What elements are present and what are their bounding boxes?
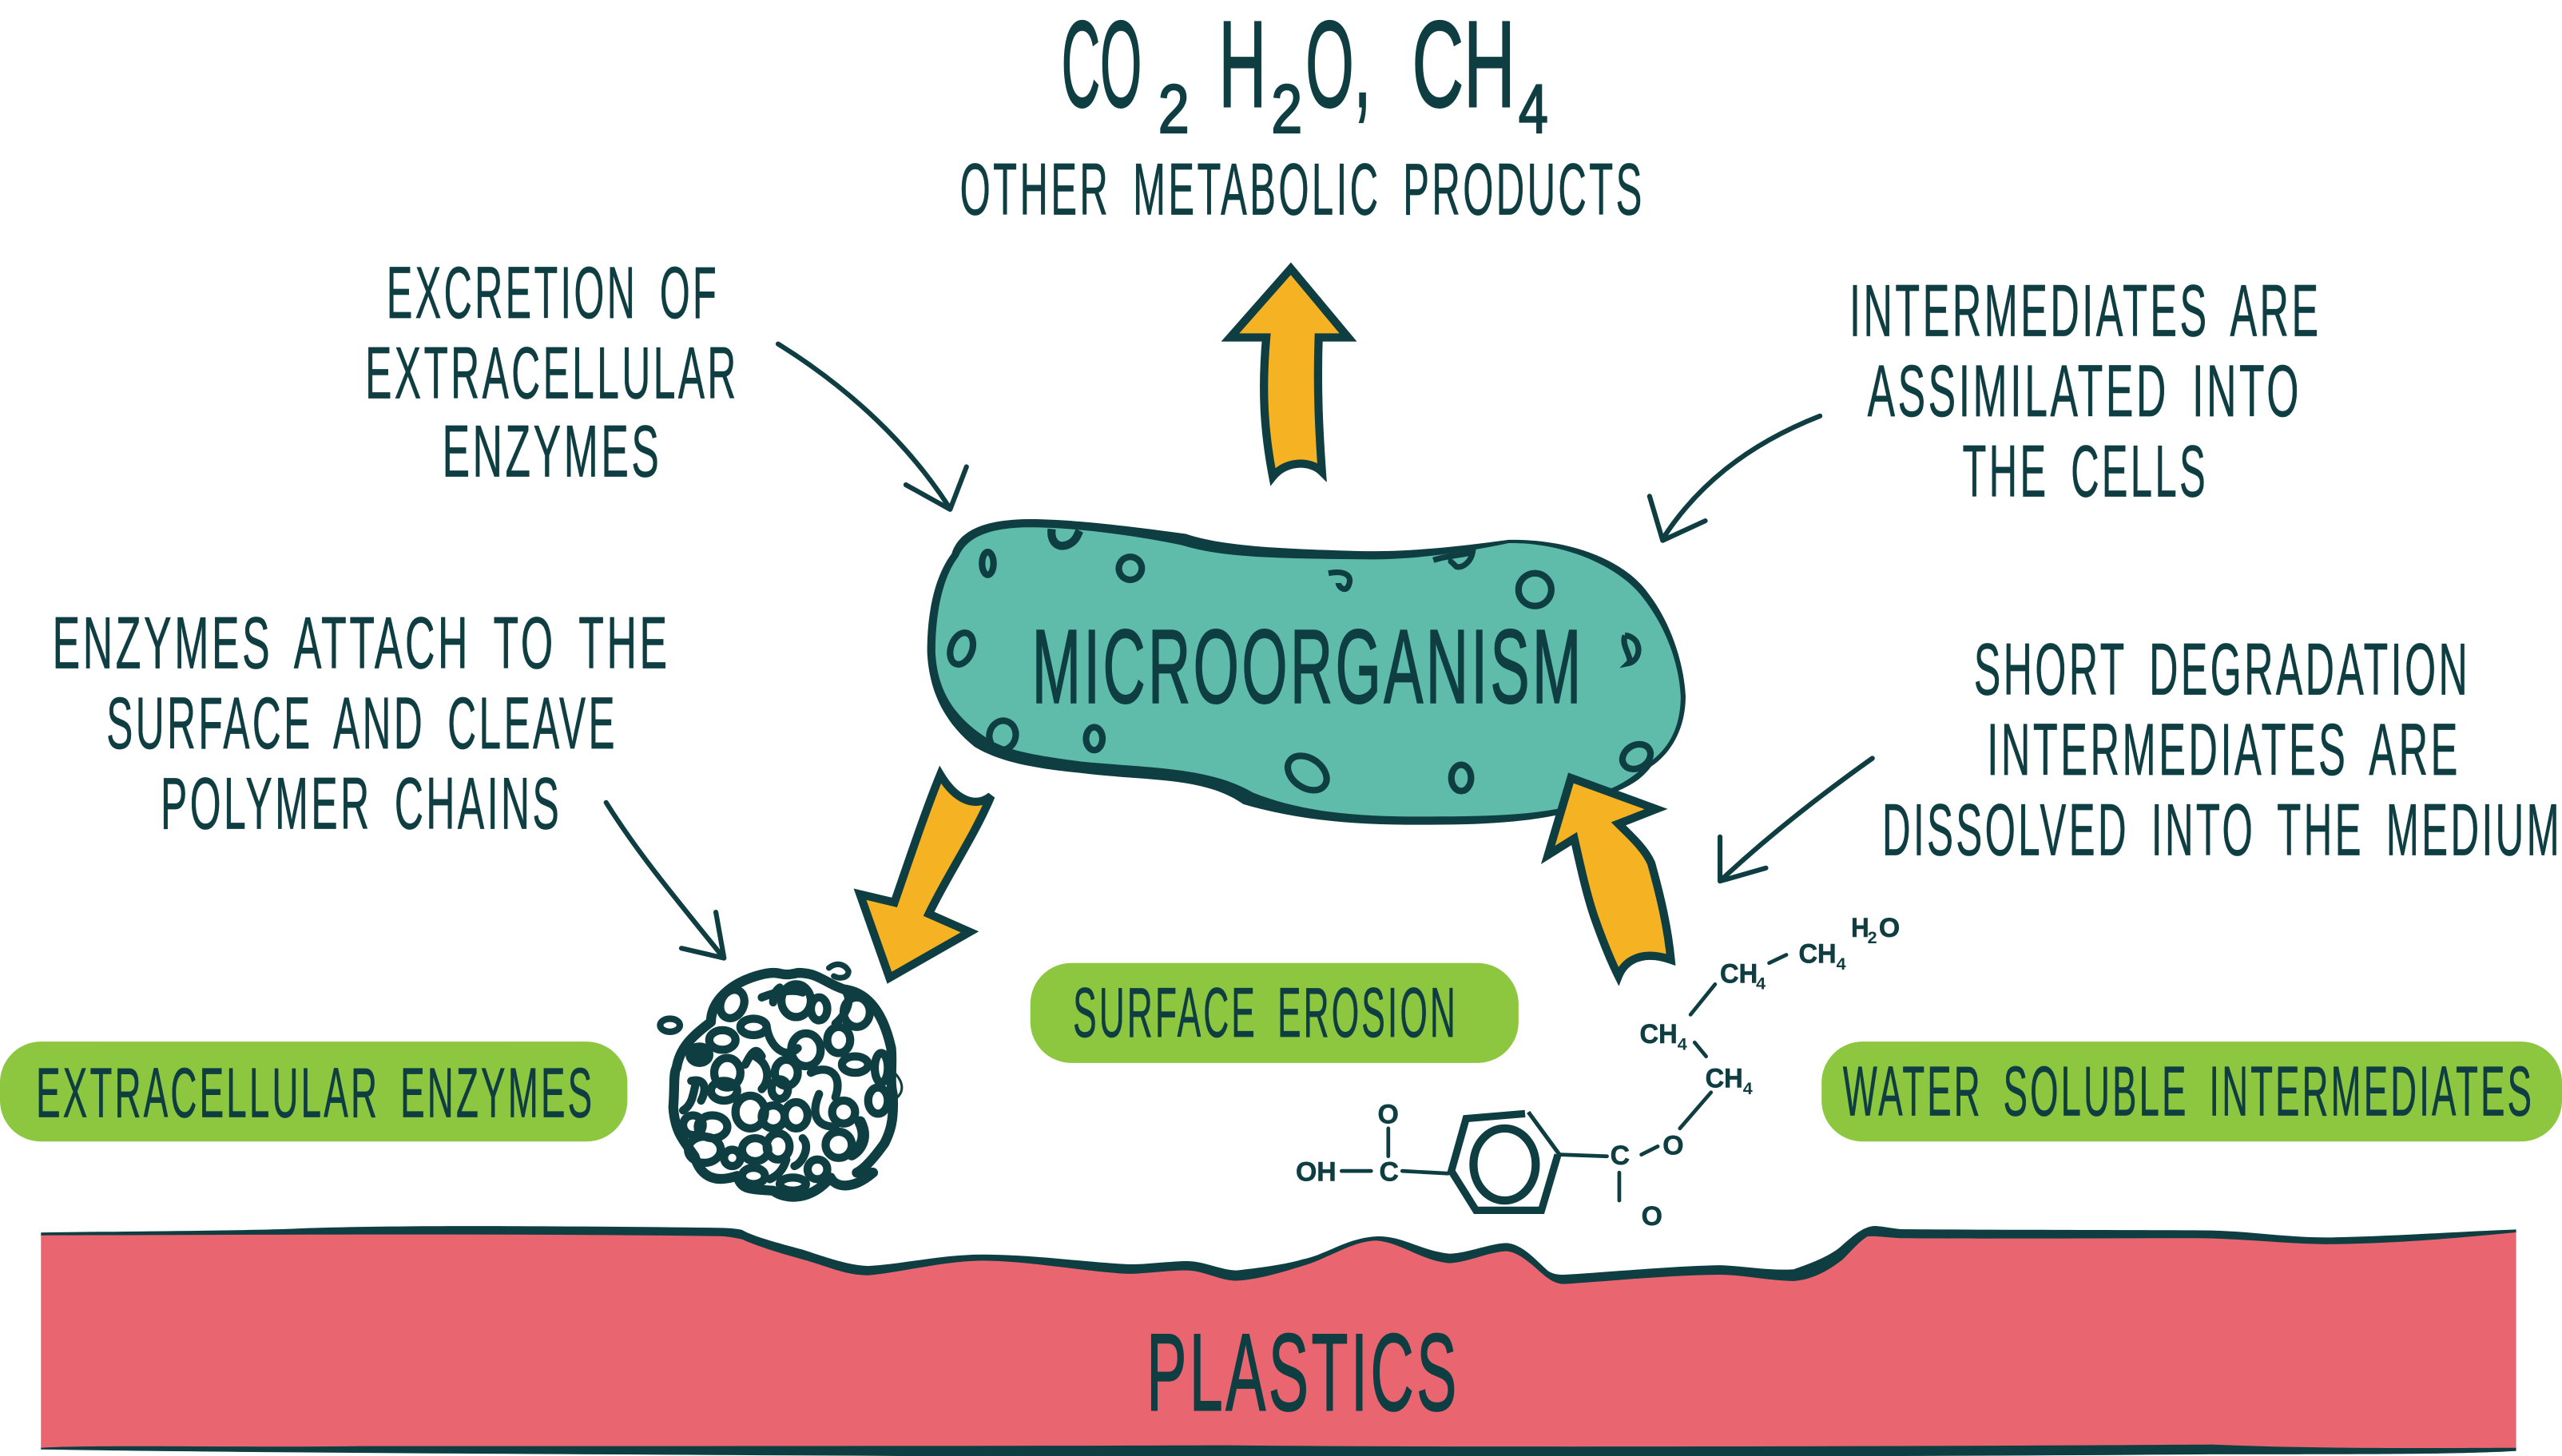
- atom labels: CH: [1706, 1064, 1743, 1094]
- panel: microorganism cell: [927, 519, 1686, 825]
- title: chemical products: 4: [1519, 71, 1548, 148]
- arrow: up into microorganism: [1548, 778, 1671, 976]
- arrow: down to extracellular enzymes: [860, 775, 991, 978]
- text block: excretion of extracellular enzymes: ENZYMES: [443, 410, 661, 493]
- label: surface erosion: SURFACE EROSION: [1073, 973, 1458, 1052]
- atom labels: C: [1380, 1156, 1399, 1187]
- text block: enzymes attach: SURFACE AND CLEAVE: [106, 681, 618, 764]
- cell label: MICROORGANISM: [1032, 608, 1584, 725]
- atom labels: CH: [1798, 939, 1837, 970]
- atom labels: O: [1642, 1201, 1662, 1232]
- arrow: assimilation into cell: [1650, 416, 1820, 541]
- subtitle: other metabolic products: OTHER METABOLIC PRODUCTS: [960, 148, 1645, 231]
- text block: excretion of extracellular enzymes: EXTRACELLULAR: [365, 331, 739, 414]
- text block: excretion of extracellular enzymes: EXCRETION OF: [387, 251, 719, 334]
- title: chemical products: [1062, 0, 1548, 148]
- text block: intermediates assimilated: THE CELLS: [1963, 429, 2208, 512]
- atom labels: 4: [1678, 1034, 1687, 1053]
- atom labels: C: [1611, 1141, 1630, 1171]
- benzene ring: [1452, 1112, 1559, 1210]
- atom labels: O: [1879, 913, 1900, 943]
- arrow: excretion to microorganism: [778, 344, 967, 510]
- label: surface erosion: [1031, 963, 1519, 1063]
- cell granules: [946, 529, 1655, 797]
- atom labels: [1296, 913, 1900, 1232]
- text block: enzymes attach: ENZYMES ATTACH TO THE: [53, 601, 670, 684]
- cell body: [935, 527, 1681, 816]
- atom labels: H: [1851, 913, 1869, 943]
- icon: extracellular enzyme clump: [660, 964, 902, 1197]
- text block: excretion of extracellular enzymes: [365, 251, 739, 493]
- atom labels: CH: [1640, 1019, 1678, 1049]
- atom labels: 4: [1756, 974, 1766, 994]
- bonds: [1341, 954, 1786, 1200]
- atom labels: CH: [1720, 958, 1758, 989]
- chemical structure: water soluble intermediate: [1296, 913, 1900, 1232]
- atom labels: O: [1662, 1131, 1684, 1161]
- arrow: up to metabolic products: [1230, 268, 1349, 477]
- title: chemical products: 2: [1158, 71, 1190, 148]
- text block: enzymes attach: POLYMER CHAINS: [161, 762, 562, 845]
- plastics body: [41, 1232, 2516, 1450]
- arrow: enzymes to surface: [606, 803, 724, 958]
- text block: intermediates assimilated: [1849, 268, 2322, 512]
- text block: enzymes attach: [53, 601, 670, 845]
- atom labels: OH: [1296, 1156, 1337, 1187]
- atom labels: O: [1377, 1100, 1399, 1130]
- text block: short degradation intermediates: [1882, 627, 2562, 871]
- label: extracellular enzymes: [0, 1041, 627, 1141]
- atom labels: 4: [1837, 954, 1846, 974]
- arrow: dissolved into medium: [1720, 758, 1873, 881]
- eroded surface line: [41, 1226, 2516, 1284]
- atom labels: 2: [1868, 928, 1877, 947]
- panel: plastics layer: [41, 1226, 2516, 1456]
- title: chemical products: 2: [1271, 71, 1302, 148]
- plastics label: PLASTICS: [1146, 1312, 1460, 1434]
- label: extracellular enzymes: EXTRACELLULAR ENZYMES: [36, 1053, 594, 1132]
- bottom edge: [41, 1445, 2516, 1456]
- cell outline: [927, 519, 1686, 825]
- atom labels: 4: [1743, 1079, 1753, 1098]
